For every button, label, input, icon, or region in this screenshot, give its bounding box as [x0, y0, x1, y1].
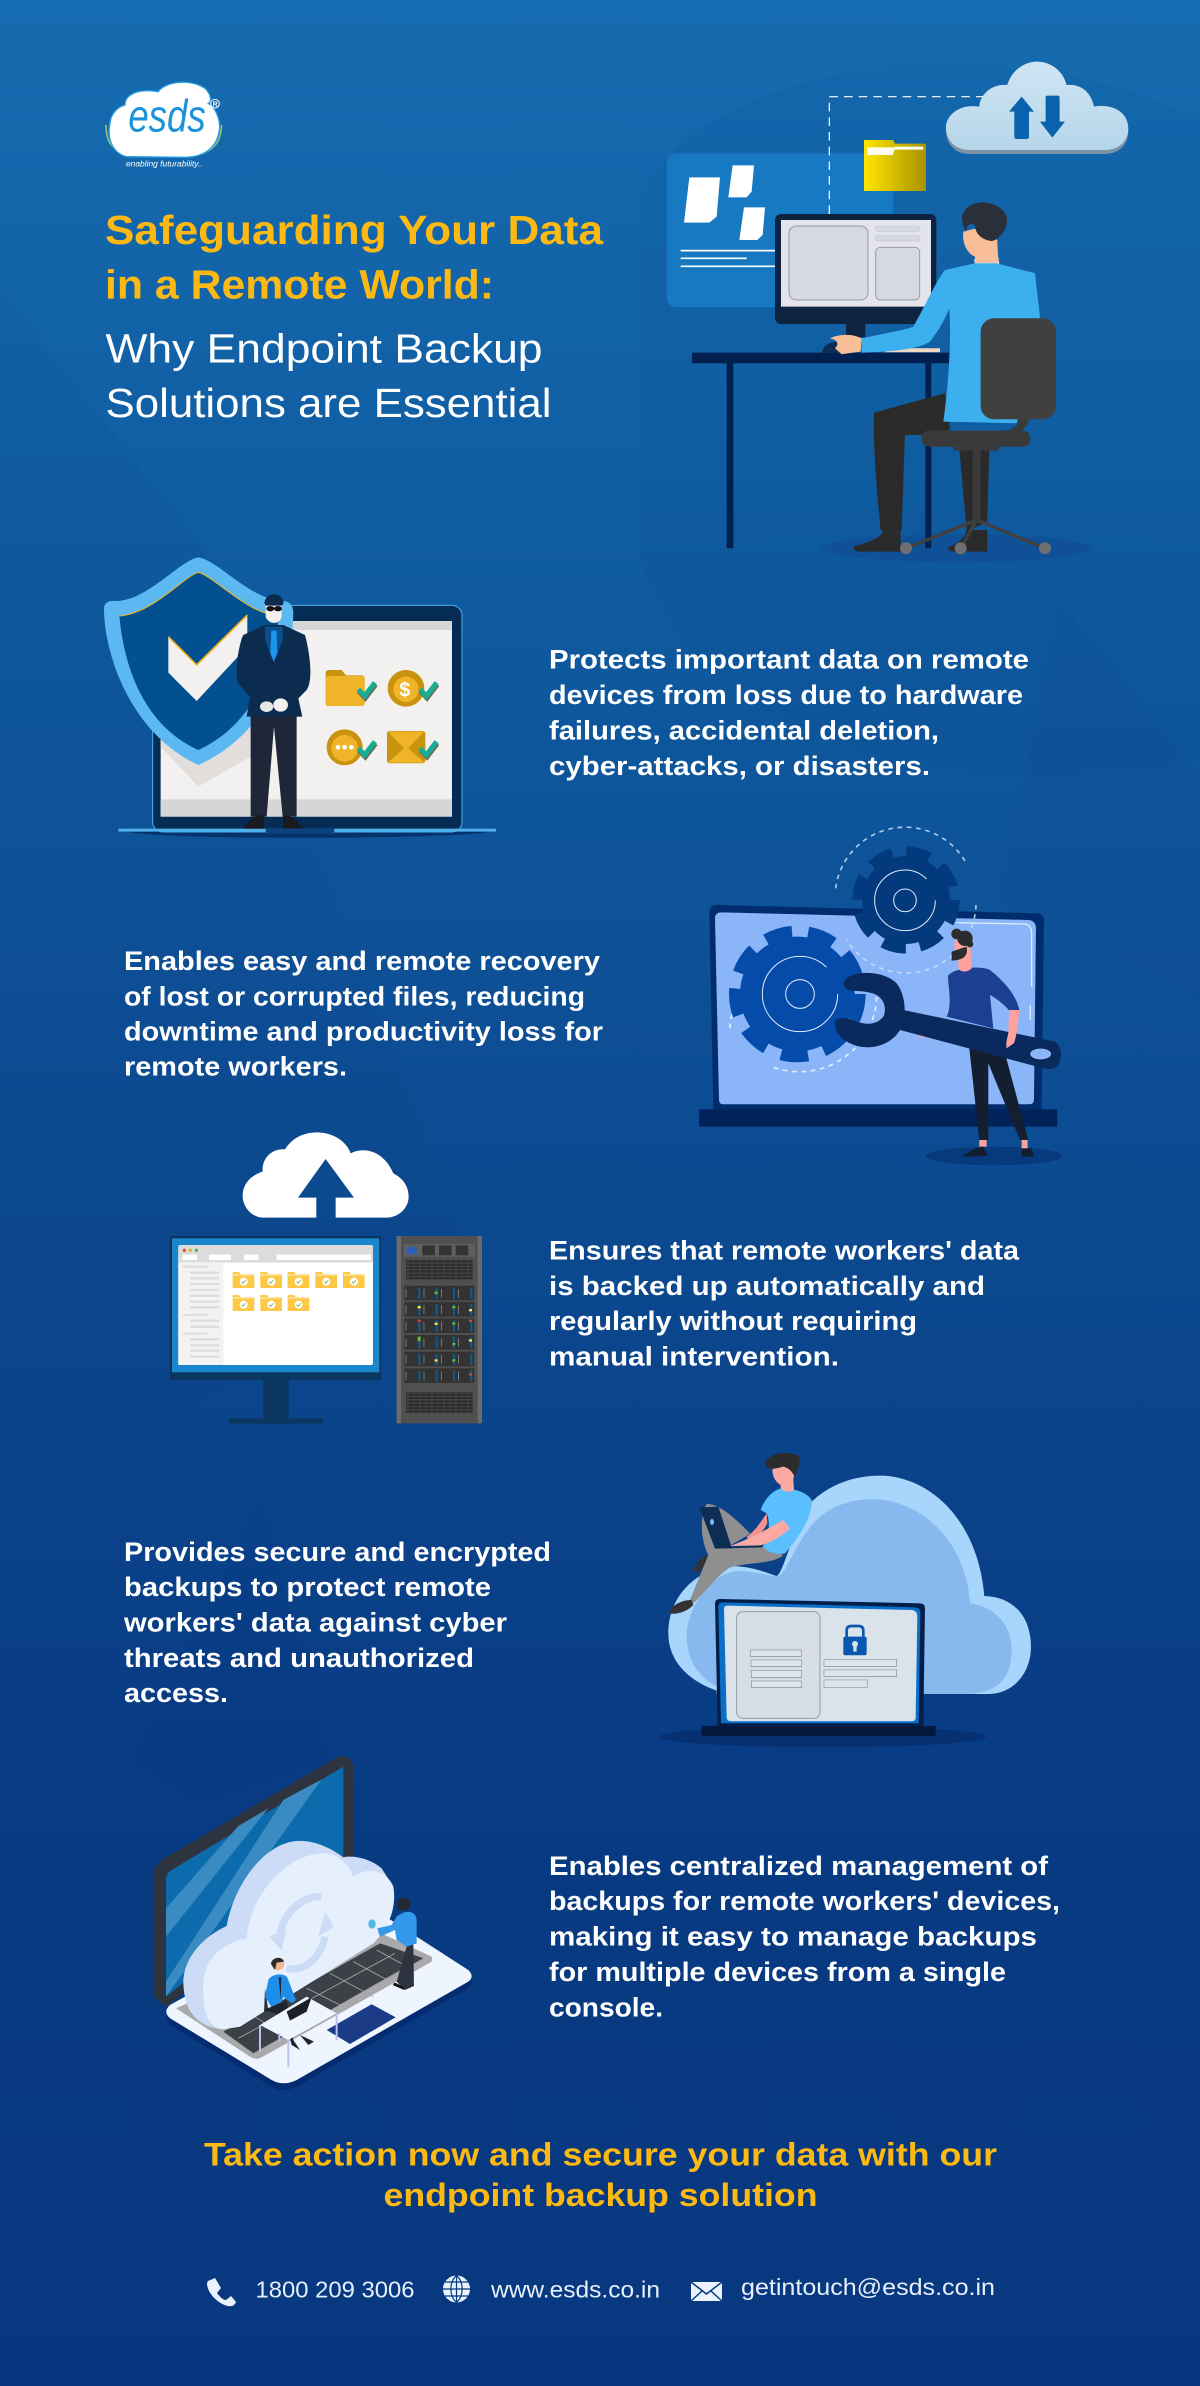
- text block: secure encrypted backups: workers' data against cyber: [123, 1608, 508, 1638]
- text block: secure encrypted backups: [123, 1537, 551, 1708]
- logo: esds: esds: [128, 91, 206, 142]
- logo: esds: R: [213, 102, 218, 109]
- text block: automatic backup: is backed up automatically and: [549, 1271, 985, 1301]
- text block: easy remote recovery: remote workers.: [124, 1052, 347, 1082]
- call to action: endpoint backup solution: [384, 2177, 818, 2213]
- text block: automatic backup: Ensures that remote workers' data: [549, 1236, 1020, 1266]
- illustration: isometric laptop with cloud and workers: [153, 1756, 472, 2090]
- illustration: person on cloud with locked laptop: [659, 1453, 1031, 1747]
- text block: secure encrypted backups: threats and unauthorized: [124, 1643, 474, 1673]
- text block: centralized management: for multiple devices from a single: [549, 1957, 1006, 1987]
- text block: centralized management: Enables centralized management of: [549, 1851, 1049, 1881]
- text block: easy remote recovery: downtime and productivity loss for: [124, 1016, 604, 1046]
- title: Why Endpoint Backup: [106, 326, 542, 372]
- contact: phone: 1800 209 3006: [256, 2276, 414, 2302]
- text block: protects important data: devices from loss due to hardware: [549, 680, 1023, 710]
- text block: centralized management: console.: [549, 1992, 663, 2022]
- text block: automatic backup: [549, 1236, 1020, 1372]
- contact: email: getintouch@esds.co.in: [741, 2274, 995, 2300]
- text block: automatic backup: regularly without requiring: [549, 1306, 917, 1336]
- text block: centralized management: backups for remote workers' devices,: [549, 1886, 1060, 1916]
- contact: phone: [207, 2276, 414, 2306]
- logo: esds: enabling futurability..: [126, 160, 203, 169]
- title: in a Remote World:: [105, 262, 494, 308]
- text block: secure encrypted backups: access.: [124, 1678, 228, 1708]
- text block: secure encrypted backups: Provides secure and encrypted: [124, 1537, 551, 1567]
- illustration: security guard, shield and laptop: [104, 557, 496, 838]
- title: [105, 207, 604, 426]
- illustration: security guard, shield and laptop: $: [399, 680, 410, 702]
- illustration: upload cloud, monitor with folders, server rack: [80, 1132, 507, 1440]
- text block: protects important data: cyber-attacks, or disasters.: [549, 751, 930, 781]
- title: Solutions are Essential: [106, 380, 552, 426]
- text block: protects important data: [549, 644, 1029, 781]
- text block: protects important data: Protects important data on remote: [549, 644, 1029, 674]
- text block: automatic backup: manual intervention.: [549, 1342, 839, 1372]
- call to action: Take action now and secure your data with our: [204, 2136, 997, 2172]
- text block: easy remote recovery: Enables easy and remote recovery: [124, 946, 600, 976]
- text block: easy remote recovery: of lost or corrupted files, reducing: [124, 982, 585, 1012]
- text block: secure encrypted backups: backups to protect remote: [124, 1572, 491, 1602]
- text block: centralized management: making it easy to manage backups: [549, 1922, 1037, 1952]
- call to action: [204, 2136, 997, 2213]
- logo: esds: [106, 82, 222, 169]
- text block: easy remote recovery: [124, 946, 604, 1082]
- contact: website: www.esds.co.in: [490, 2276, 660, 2302]
- hero illustration: worker at desk with cloud backup: [667, 62, 1128, 562]
- illustration: gears, wrench and laptop: [699, 827, 1062, 1165]
- text block: protects important data: failures, accidental deletion,: [549, 716, 939, 746]
- text block: centralized management: [549, 1851, 1060, 2022]
- title: Safeguarding Your Data: [105, 207, 604, 253]
